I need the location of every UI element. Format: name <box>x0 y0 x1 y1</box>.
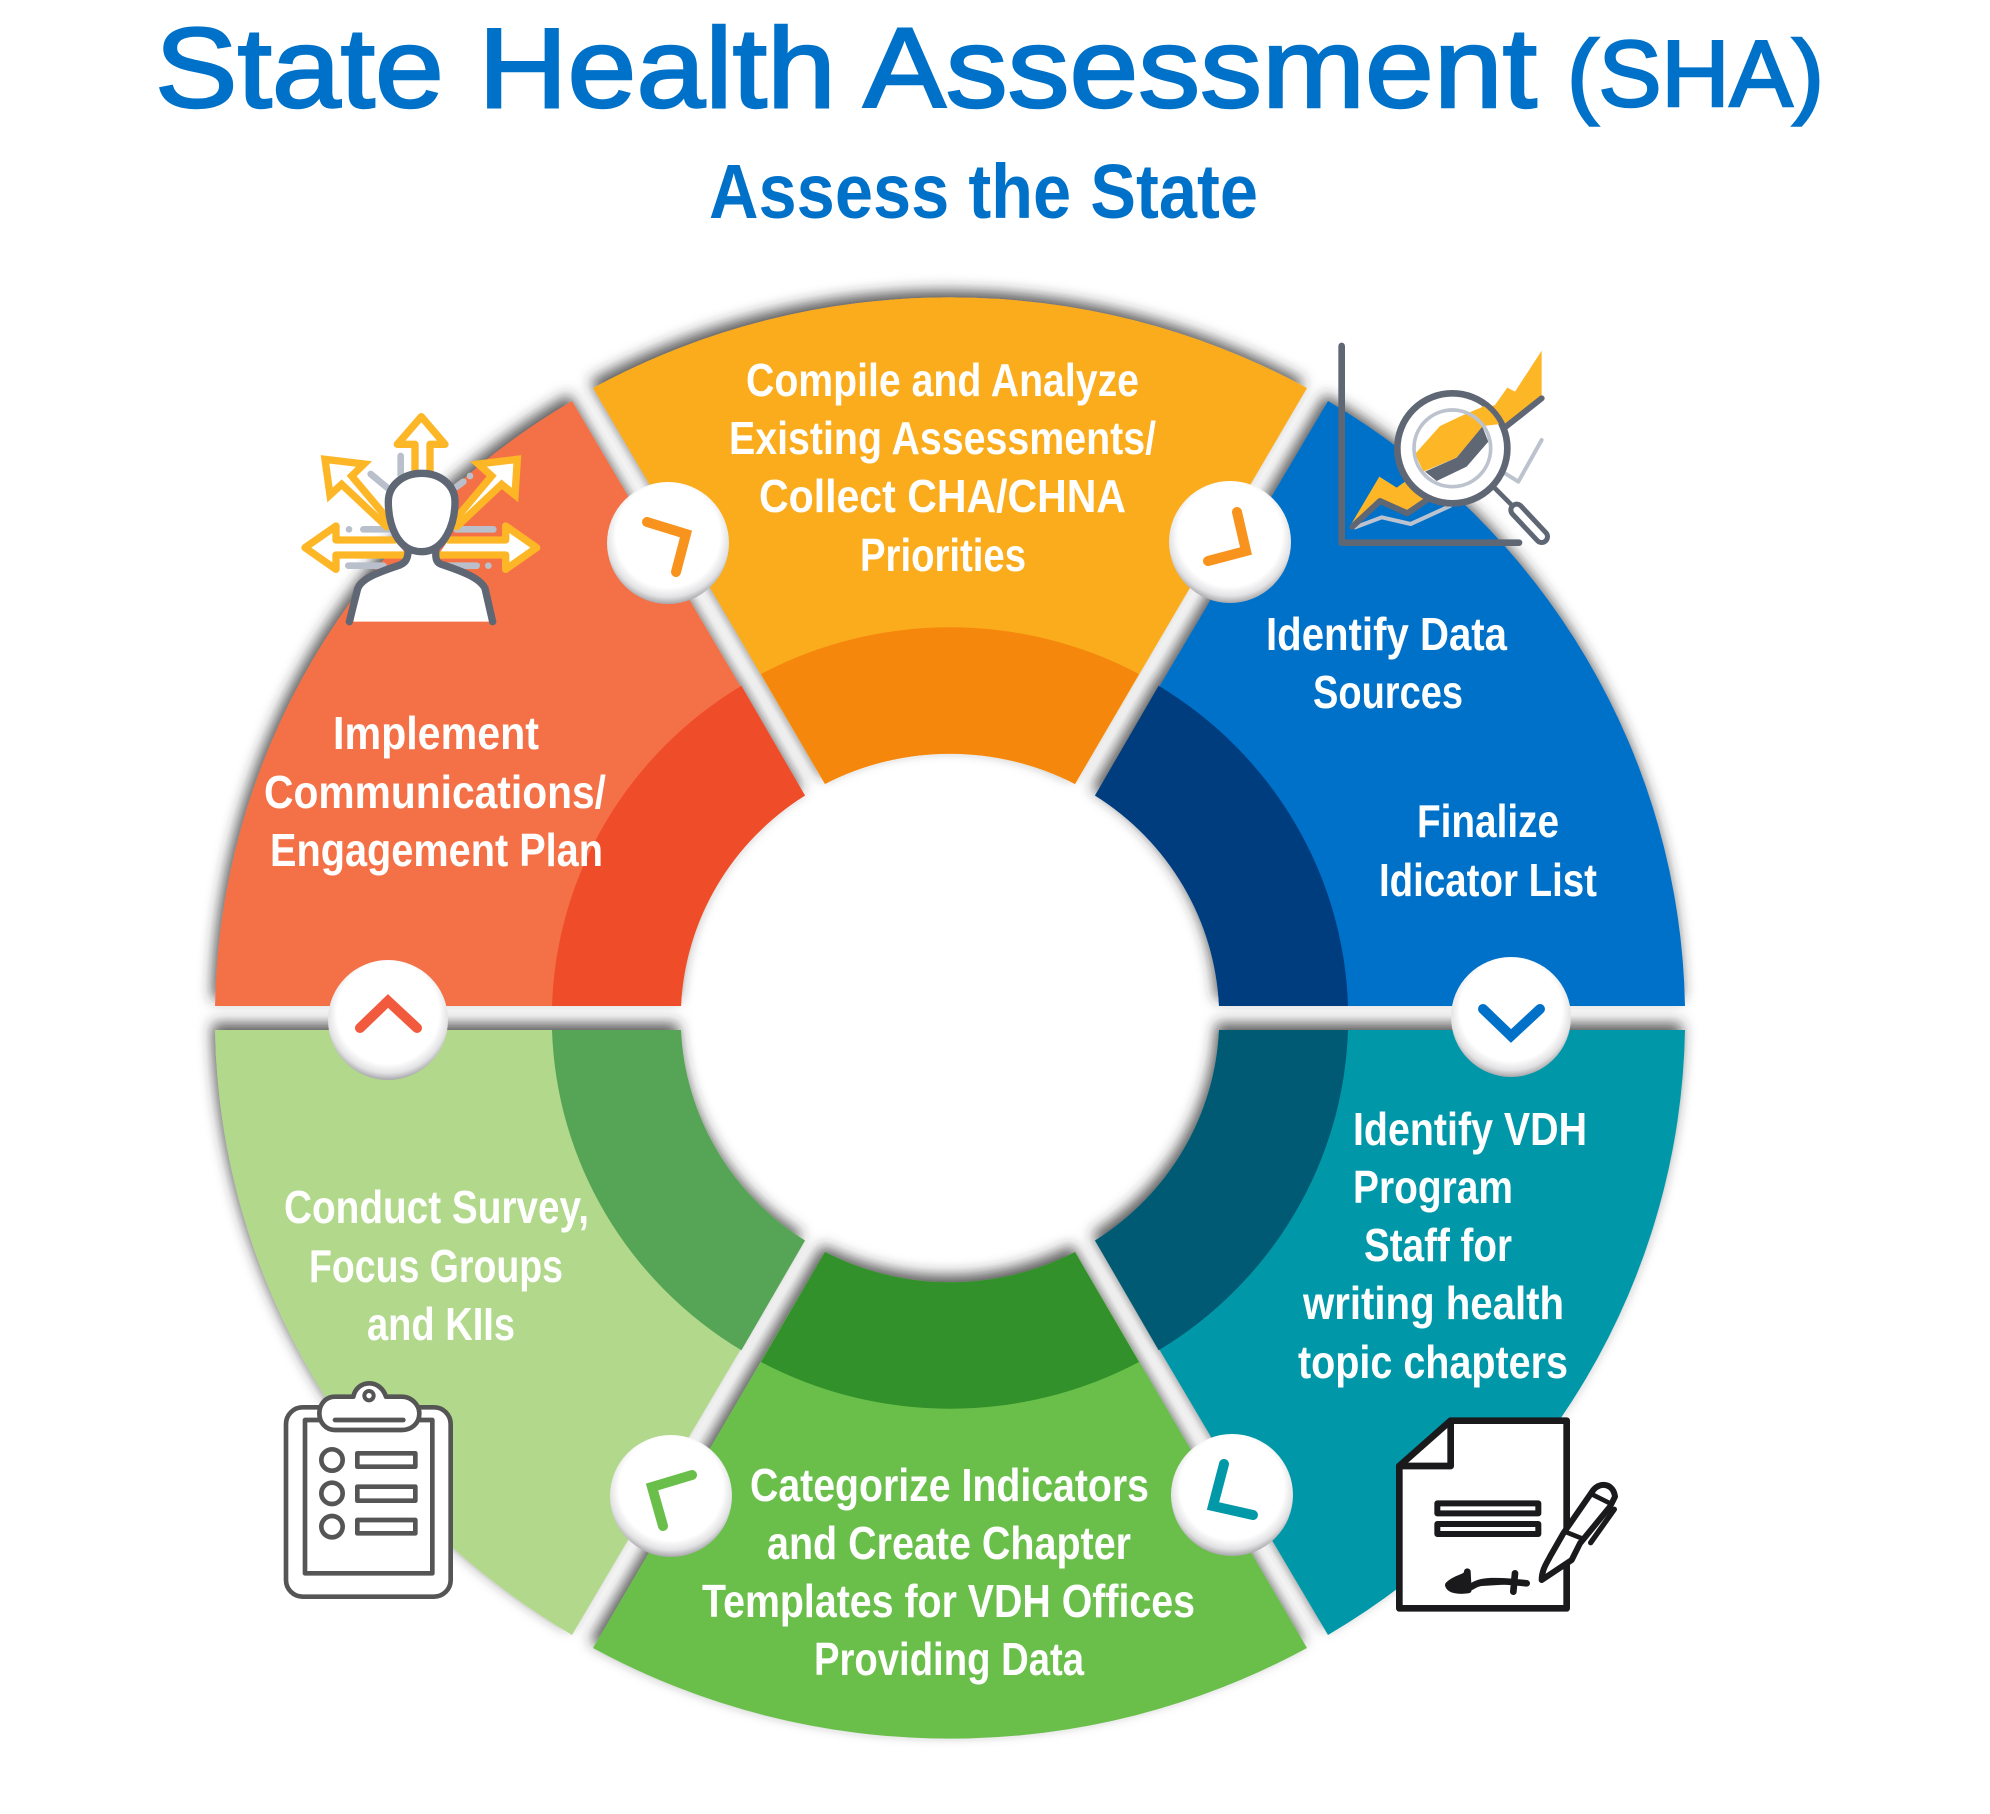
label: categorize indicators: Providing Data <box>814 1633 1084 1685</box>
panel: compile and analyze <box>593 297 1307 784</box>
label: categorize indicators: and Create Chapter <box>767 1517 1131 1569</box>
panel: implement communications <box>215 401 805 1006</box>
label: compile and analyze: Collect CHA/CHNA <box>759 470 1126 522</box>
badge: right arrow <box>1451 957 1571 1077</box>
label: identify VDH program staff: Staff for <box>1364 1219 1512 1271</box>
badge: upper right arrow <box>1169 481 1291 603</box>
label: implement communications: Engagement Plan <box>270 824 603 876</box>
label: categorize indicators: Templates for VDH Offices <box>702 1575 1195 1627</box>
label: conduct survey <box>284 1181 589 1350</box>
ring: mid green <box>552 1030 805 1350</box>
label: compile and analyze: Existing Assessments/ <box>729 412 1156 464</box>
label: implement communications <box>264 707 606 876</box>
label: identify VDH program staff <box>1298 1103 1587 1388</box>
wedge: green <box>593 1252 1307 1739</box>
label: compile and analyze: Priorities <box>860 529 1026 581</box>
wedge: light green <box>215 1030 805 1635</box>
label: conduct survey: and KIIs <box>367 1298 515 1350</box>
process wheel <box>215 297 1685 1739</box>
label: categorize indicators <box>702 1459 1195 1685</box>
panel: identify data sources <box>1095 401 1685 1006</box>
ring: dark teal <box>1095 1030 1348 1350</box>
label: implement communications: Implement <box>333 707 539 759</box>
badge: upper left arrow <box>607 482 729 604</box>
badge: lower right arrow <box>1171 1434 1293 1556</box>
label: implement communications: Communications/ <box>264 766 606 818</box>
label: conduct survey: Focus Groups <box>309 1240 563 1292</box>
wedge: blue <box>1095 401 1685 1006</box>
label: identify VDH program staff: Program <box>1353 1161 1513 1213</box>
label: identify data sources and finalize list: Identify Data <box>1266 608 1507 660</box>
ring: navy <box>1095 686 1348 1006</box>
ring: dark green <box>761 1252 1139 1409</box>
badge: left arrow <box>328 960 448 1080</box>
label: compile and analyze: Compile and Analyze <box>746 354 1139 406</box>
panel: categorize indicators <box>593 1252 1307 1739</box>
badge: lower left arrow <box>610 1435 732 1557</box>
label: identify VDH program staff: Identify VDH <box>1353 1103 1587 1155</box>
label: identify VDH program staff: writing health <box>1302 1277 1564 1329</box>
icon: person with arrows <box>305 417 537 622</box>
subtitle: Assess the State <box>709 149 1258 235</box>
icon: signed document with pen <box>1399 1421 1615 1608</box>
ring: red <box>552 686 805 1006</box>
title: State Health Assessment <box>155 5 1537 131</box>
wedge: teal <box>1095 1030 1685 1635</box>
label: identify data sources and finalize list <box>1266 608 1597 906</box>
icon: chart with magnifier <box>1342 346 1542 543</box>
ring: dark orange <box>761 627 1139 784</box>
title: (SHA) <box>1567 21 1824 126</box>
panel: identify VDH program staff <box>1095 1030 1685 1635</box>
label: conduct survey: Conduct Survey, <box>284 1181 589 1233</box>
label: compile and analyze <box>729 354 1156 581</box>
panel: conduct survey <box>215 1030 805 1635</box>
wedge: coral <box>215 401 805 1006</box>
label: identify data sources and finalize list: Finalize <box>1417 795 1559 847</box>
label: identify data sources and finalize list: Sources <box>1313 666 1463 718</box>
wedge: orange <box>593 297 1307 784</box>
icon: clipboard <box>286 1383 451 1597</box>
label: categorize indicators: Categorize Indicators <box>750 1459 1149 1511</box>
label: identify data sources and finalize list: Idicator List <box>1379 854 1597 906</box>
label: identify VDH program staff: topic chapters <box>1298 1336 1568 1388</box>
